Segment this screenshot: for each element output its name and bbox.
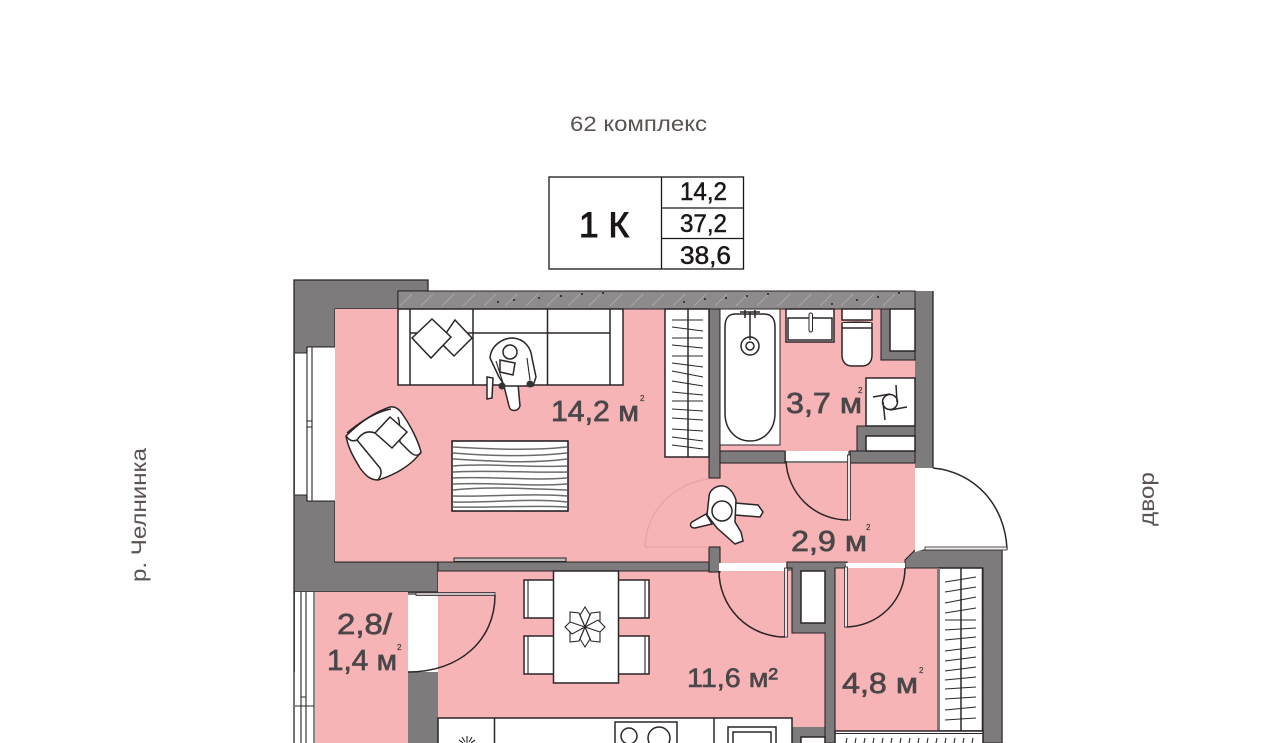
dining table with flower [554, 571, 618, 683]
area label: living room: 14,2 м [551, 396, 639, 428]
label: yard side: двор [1136, 472, 1159, 526]
entrance door [925, 468, 1007, 550]
area label: balcony: 2 [397, 643, 402, 652]
floor plan [294, 280, 1007, 743]
apartment walls [294, 280, 1002, 743]
label: river side: р. Челнинка [128, 448, 151, 582]
bathroom door [786, 455, 850, 520]
sofa [398, 309, 623, 385]
area label: hallway: 2,9 м [791, 526, 867, 558]
toilet [842, 309, 872, 366]
area table: 37,2 [680, 210, 727, 238]
shaft [890, 309, 915, 351]
area label: balcony: 1,4 м [327, 645, 397, 677]
living room wardrobe [665, 309, 709, 457]
lower niche [801, 737, 825, 743]
kitchen counter [438, 718, 792, 743]
area table: 38,6 [680, 242, 731, 270]
person on sofa [487, 338, 536, 410]
area label: bathroom: 2 [858, 386, 863, 395]
area label: living room: 2 [640, 394, 645, 403]
area label: balcony [327, 609, 402, 677]
label: complex name: 62 комплекс [570, 113, 707, 136]
person in hallway [691, 486, 763, 544]
area label: bathroom: 3,7 м [786, 388, 862, 420]
armchair [346, 407, 421, 480]
washbasin [786, 309, 834, 342]
niche in kitchen wall [801, 571, 825, 623]
pink room floors [315, 309, 939, 743]
balcony door [408, 592, 495, 672]
area label: storage: 4,8 м [842, 668, 918, 700]
balcony window [295, 592, 315, 743]
area table [549, 177, 744, 270]
white openings [408, 451, 1007, 672]
small utility niche [866, 436, 915, 451]
living room door arc [645, 479, 709, 547]
area label: storage: 2 [919, 666, 924, 675]
striped rug [452, 441, 568, 511]
area label: hallway: 2 [866, 523, 871, 532]
area table: 1 К [579, 206, 630, 245]
dining chairs [524, 580, 649, 674]
tv stand [454, 558, 566, 562]
ventilation box [866, 378, 915, 426]
concrete wall strip [398, 291, 915, 309]
storage wardrobe [938, 568, 982, 731]
area label: balcony: 2,8/ [337, 609, 393, 641]
lower wardrobe [835, 731, 983, 743]
storage door [844, 567, 905, 627]
area label: kitchen: 11,6 м² [687, 663, 778, 693]
bathtub [720, 309, 780, 445]
interior walls [335, 309, 1002, 743]
area table: 14,2 [680, 178, 727, 206]
kitchen door [719, 568, 788, 637]
living room window [295, 347, 335, 501]
